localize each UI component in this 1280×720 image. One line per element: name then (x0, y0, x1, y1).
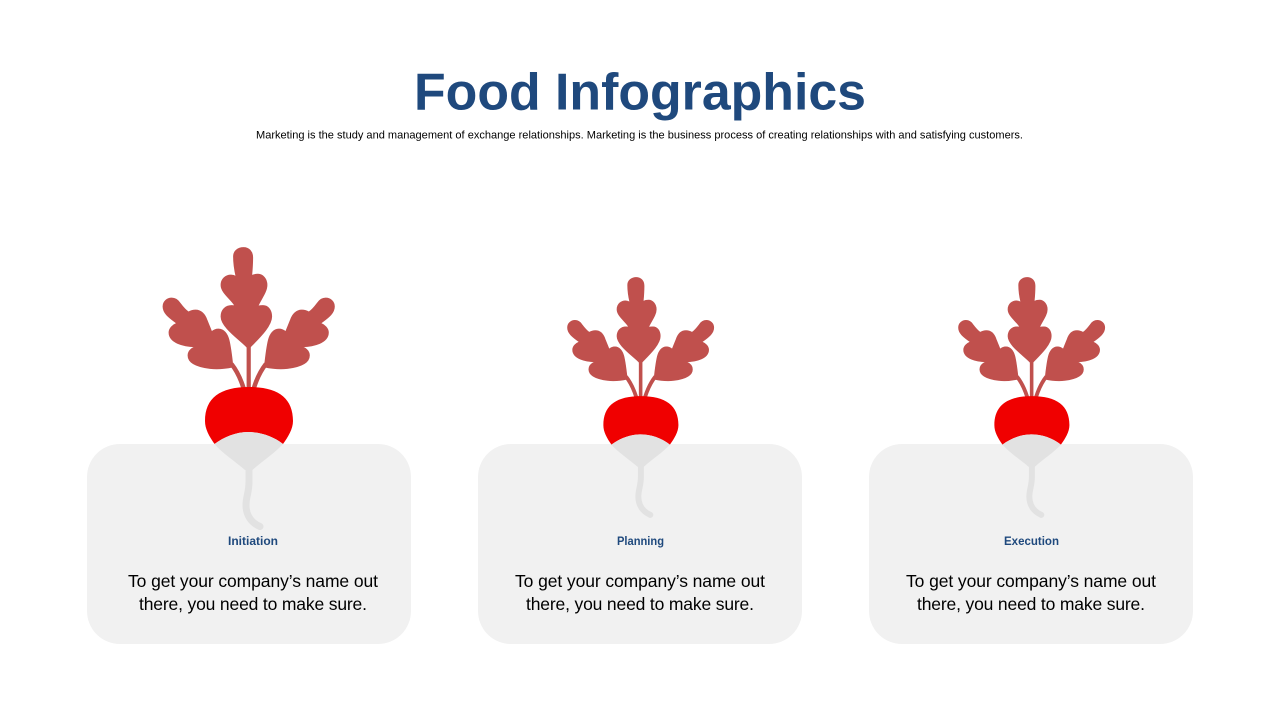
panel: execution (869, 277, 1193, 644)
icon: radish (959, 277, 1105, 515)
panel: initiation (87, 248, 411, 644)
description: there, you need to make sure. (526, 594, 754, 614)
description: To get your company’s name out (515, 571, 765, 591)
description: To get your company’s name out (128, 571, 378, 591)
card background (478, 444, 802, 644)
card background (87, 444, 411, 644)
label: Execution (1004, 536, 1059, 548)
description: there, you need to make sure. (139, 594, 367, 614)
label: Planning (617, 536, 664, 548)
description: To get your company’s name out (906, 571, 1156, 591)
title: Food Infographics (414, 64, 866, 122)
icon: radish (568, 277, 714, 515)
card background (869, 444, 1193, 644)
icon: radish (163, 248, 334, 526)
description: there, you need to make sure. (917, 594, 1145, 614)
subtitle: Marketing is the study and management of exchange relationships. Marketing is the business process of creating relationships with and satisfying customers. (256, 130, 1023, 142)
panel: planning (478, 277, 802, 644)
label: Initiation (228, 536, 278, 548)
